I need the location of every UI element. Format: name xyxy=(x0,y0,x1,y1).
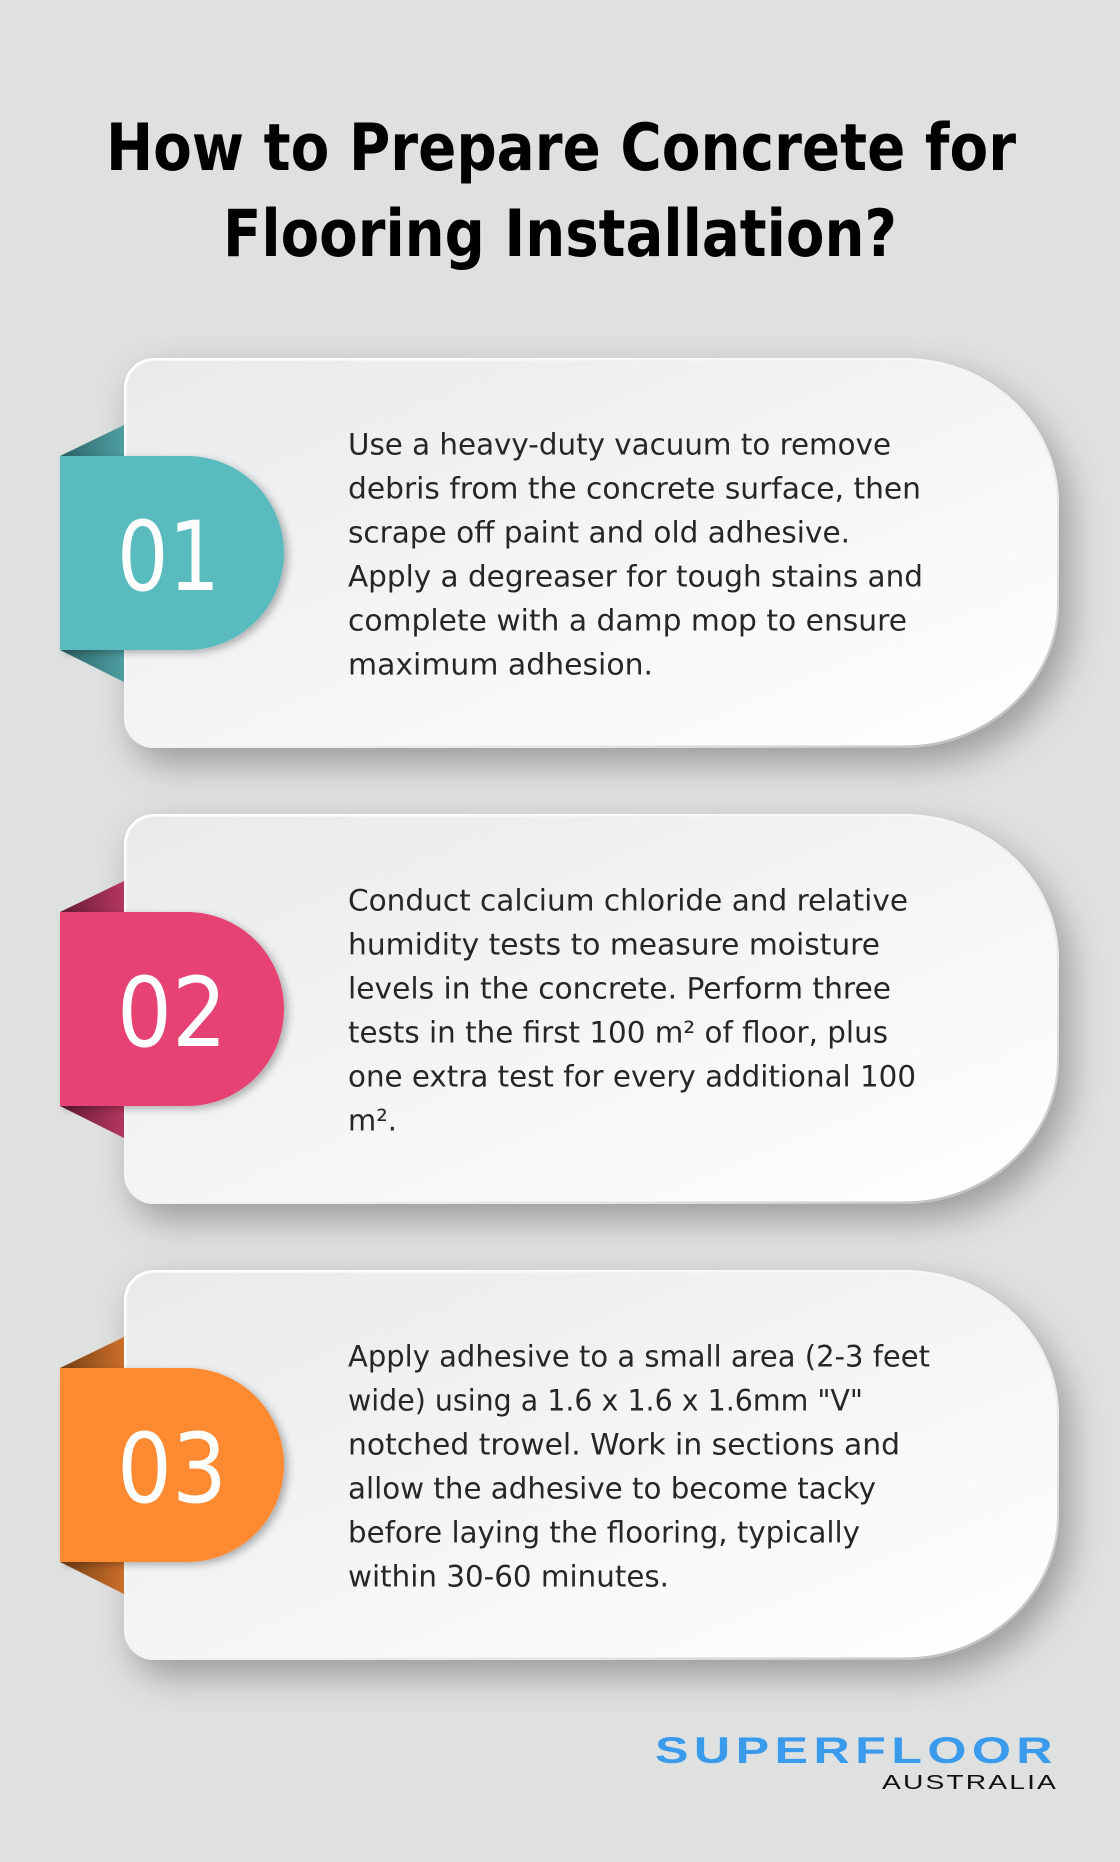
logo: Superfloor Australia xyxy=(655,1730,1058,1794)
step 1 text: maximum adhesion. xyxy=(348,648,653,682)
title: Flooring Installation? xyxy=(223,197,897,272)
step 3 text: notched trowel. Work in sections and xyxy=(348,1428,900,1462)
panel: step 2 moisture testing xyxy=(60,814,1059,1204)
ribbon fold top 3 xyxy=(60,1337,124,1368)
step 2 text: levels in the concrete. Perform three xyxy=(348,972,891,1006)
step 1 text: complete with a damp mop to ensure xyxy=(348,604,907,638)
number 03: 03 xyxy=(117,1413,227,1525)
logo: Superfloor Australia: SUPERFLOOR xyxy=(655,1730,1058,1771)
step 1 text xyxy=(348,428,923,682)
step 1 text: scrape off paint and old adhesive. xyxy=(348,516,850,550)
number 01: 01 xyxy=(117,501,220,613)
ribbon fold bottom 1 xyxy=(60,650,124,682)
ribbon fold bottom 3 xyxy=(60,1562,124,1594)
panel: step 1 clean the surface xyxy=(60,358,1059,748)
panel: step 3 apply adhesive xyxy=(60,1270,1059,1660)
title xyxy=(106,111,1016,272)
step 1 text: debris from the concrete surface, then xyxy=(348,472,921,506)
step 2 text: m². xyxy=(348,1104,397,1138)
ribbon fold bottom 2 xyxy=(60,1106,124,1138)
step 2 text: one extra test for every additional 100 xyxy=(348,1060,916,1094)
step 3 text xyxy=(348,1340,930,1594)
step 2 text xyxy=(348,884,916,1138)
step 2 text: humidity tests to measure moisture xyxy=(348,928,880,962)
number badge 2 xyxy=(60,912,284,1106)
ribbon fold top 2 xyxy=(60,881,124,912)
number badge 1 xyxy=(60,456,284,650)
card 1 background xyxy=(124,358,1059,748)
step 3 text: allow the adhesive to become tacky xyxy=(348,1472,876,1506)
card 2 background xyxy=(124,814,1059,1204)
number badge 3 xyxy=(60,1368,284,1562)
logo: Superfloor Australia: AUSTRALIA xyxy=(882,1772,1058,1794)
step 3 text: Apply adhesive to a small area (2-3 feet xyxy=(348,1340,930,1374)
step 2 text: tests in the first 100 m² of floor, plus xyxy=(348,1016,888,1050)
ribbon fold top 1 xyxy=(60,425,124,456)
card 3 background xyxy=(124,1270,1059,1660)
number 02: 02 xyxy=(117,957,227,1069)
step 3 text: within 30-60 minutes. xyxy=(348,1560,669,1594)
step 3 text: wide) using a 1.6 x 1.6 x 1.6mm "V" xyxy=(348,1384,863,1418)
step 3 text: before laying the flooring, typically xyxy=(348,1516,860,1550)
step 1 text: Use a heavy-duty vacuum to remove xyxy=(348,428,891,462)
step 1 text: Apply a degreaser for tough stains and xyxy=(348,560,923,594)
step 2 text: Conduct calcium chloride and relative xyxy=(348,884,908,918)
